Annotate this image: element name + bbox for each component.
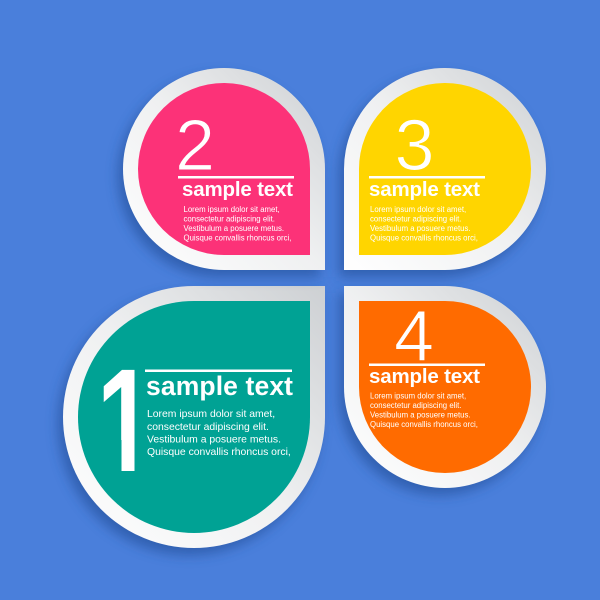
body text: Lorem ipsum dolor sit amet, bbox=[370, 392, 466, 400]
rule bbox=[369, 176, 485, 178]
rule bbox=[178, 176, 294, 178]
body text: Lorem ipsum dolor sit amet, bbox=[147, 409, 275, 420]
heading: sample text bbox=[369, 178, 480, 201]
body text: consectetur adipiscing elit. bbox=[147, 422, 269, 433]
number 3: 3 bbox=[394, 106, 435, 186]
number 4: 4 bbox=[394, 297, 434, 377]
body text: Quisque convallis rhoncus orci, bbox=[147, 447, 291, 458]
heading: sample text bbox=[146, 371, 293, 401]
panel: step 4 bbox=[339, 286, 546, 495]
panel: step 3 bbox=[339, 68, 546, 277]
heading: sample text bbox=[369, 365, 480, 388]
body text bbox=[370, 392, 478, 429]
rule bbox=[145, 370, 292, 372]
number 2: 2 bbox=[175, 106, 215, 186]
body text: Lorem ipsum dolor sit amet, bbox=[184, 205, 280, 214]
body text: Quisque convallis rhoncus orci, bbox=[370, 420, 478, 429]
body text: Lorem ipsum dolor sit amet, bbox=[370, 205, 466, 214]
body text bbox=[184, 205, 291, 242]
panel: step 1 bbox=[58, 286, 325, 555]
number 1: 1 bbox=[96, 339, 155, 503]
rule bbox=[369, 364, 485, 366]
panel: step 2 bbox=[118, 68, 325, 277]
heading: sample text bbox=[182, 178, 293, 201]
body text: Vestibulum a posuere metus. bbox=[147, 434, 281, 446]
body text: consectetur adipiscing elit. bbox=[370, 401, 461, 410]
body text bbox=[370, 205, 478, 242]
body text: Quisque convallis rhoncus orci, bbox=[184, 234, 291, 242]
body text: Quisque convallis rhoncus orci, bbox=[370, 234, 478, 242]
body text: Vestibulum a posuere metus. bbox=[370, 224, 471, 233]
body text: consectetur adipiscing elit. bbox=[184, 214, 275, 224]
body text bbox=[147, 409, 291, 458]
body text: Vestibulum a posuere metus. bbox=[370, 410, 471, 420]
body text: Vestibulum a posuere metus. bbox=[184, 224, 284, 233]
body text: consectetur adipiscing elit. bbox=[370, 214, 461, 224]
